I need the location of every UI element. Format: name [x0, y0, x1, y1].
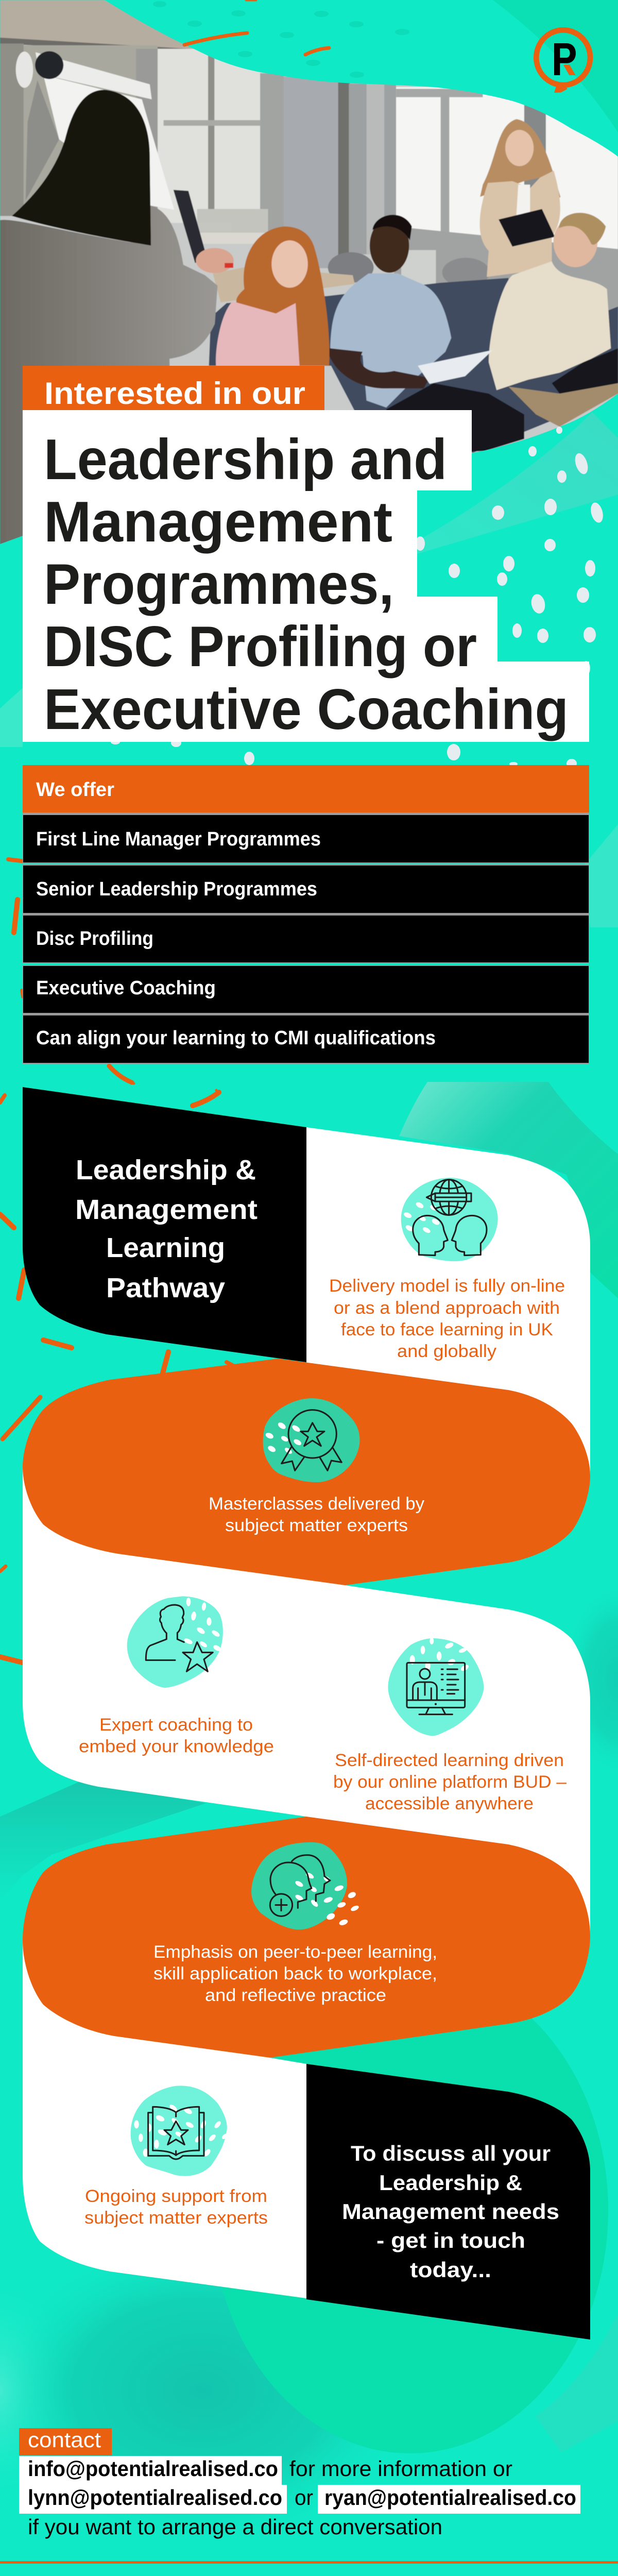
text: peer-to-peer learning: Emphasis on peer-to-peer learning, — [153, 1942, 437, 1962]
title block — [23, 366, 589, 742]
icon: two heads with plus — [251, 1842, 359, 1929]
text: peer-to-peer learning — [153, 1942, 437, 2005]
email line two: lynn@potentialrealised.co — [28, 2485, 282, 2510]
email line one: for more information or — [289, 2456, 512, 2481]
email line two: or — [295, 2485, 313, 2510]
text: masterclasses: Masterclasses delivered by — [209, 1494, 424, 1514]
text: self-directed learning: Self-directed learning driven — [335, 1751, 564, 1770]
email line two: ryan@potentialrealised.co — [324, 2485, 576, 2510]
contact block — [19, 2428, 580, 2539]
text: delivery model: Delivery model is fully on-line — [329, 1276, 565, 1296]
text: peer-to-peer learning: and reflective practice — [205, 1986, 386, 2005]
logo: P speech bubble — [536, 30, 590, 93]
icon: person with star — [127, 1596, 223, 1688]
pathway ribbon — [23, 1087, 590, 2340]
title kicker: Interested in our — [44, 376, 305, 411]
list item — [23, 914, 589, 963]
icon: award rosette — [263, 1398, 359, 1482]
contact label: contact — [28, 2428, 101, 2452]
black panel: call to action: today... — [410, 2258, 491, 2282]
seated red-haired woman in photo — [236, 226, 330, 366]
panel: delivery model — [329, 1178, 565, 1361]
ribbon white section two — [23, 1467, 590, 1935]
list item: Executive Coaching — [36, 977, 216, 999]
black panel: pathway heading: Management — [75, 1194, 258, 1225]
hero photo: trainer presenting to seated team — [0, 0, 618, 546]
panel: expert coaching — [79, 1596, 274, 1756]
standing woman in photo — [480, 119, 560, 197]
black panel: call to action — [306, 2064, 590, 2340]
list item — [23, 965, 589, 1014]
ribbon white section three — [23, 1940, 306, 2298]
text: delivery model: or as a blend approach with — [334, 1298, 560, 1318]
list heading — [23, 765, 589, 814]
panel: ongoing support — [84, 2086, 268, 2228]
ribbon white section one — [306, 1127, 590, 1476]
text: delivery model: and globally — [397, 1342, 496, 1361]
text: ongoing support: subject matter experts — [84, 2208, 268, 2228]
black panel: call to action: To discuss all your — [351, 2141, 551, 2165]
list item: Disc Profiling — [36, 928, 153, 950]
text: ongoing support — [84, 2187, 268, 2228]
panel: self-directed learning — [333, 1637, 566, 1814]
list item: Can align your learning to CMI qualifications — [36, 1027, 436, 1049]
email line two — [19, 2485, 580, 2514]
presenter in photo — [0, 206, 217, 546]
text: self-directed learning: by our online platform BUD – — [333, 1772, 566, 1792]
text: ongoing support: Ongoing support from — [85, 2187, 267, 2206]
text: expert coaching: Expert coaching to — [99, 1715, 253, 1735]
main title: Programmes, — [44, 552, 394, 616]
main title: DISC Profiling or — [44, 615, 477, 679]
text: masterclasses — [209, 1494, 424, 1535]
text: peer-to-peer learning: skill application back to workplace, — [153, 1964, 437, 1984]
seated blond man in photo — [508, 383, 618, 427]
icon: online tutor monitor — [388, 1637, 484, 1736]
email line one — [19, 2456, 512, 2485]
main title: Management — [44, 490, 392, 554]
list heading: We offer — [36, 779, 114, 801]
black panel: pathway heading: Learning — [106, 1232, 225, 1263]
main title: Leadership and — [44, 428, 447, 492]
contact closing line: if you want to arrange a direct conversation — [28, 2515, 442, 2539]
main title — [23, 410, 589, 742]
text: expert coaching — [79, 1715, 274, 1756]
seated man in blue shirt in photo — [386, 383, 524, 453]
panel: peer-to-peer learning — [23, 1817, 590, 2058]
list item — [23, 814, 589, 863]
flip chart in photo — [43, 75, 174, 210]
text: delivery model — [329, 1276, 565, 1361]
text: self-directed learning: accessible anywhere — [365, 1794, 534, 1814]
list item — [23, 865, 589, 914]
black panel: pathway heading: Pathway — [106, 1273, 225, 1303]
black panel: pathway heading — [23, 1087, 306, 1362]
black panel: call to action: Leadership & — [379, 2171, 522, 2195]
icon: open book with star — [131, 2086, 229, 2176]
white speckle dots — [111, 427, 614, 2576]
faint teal dashes on header shape — [153, 1, 409, 78]
offer list — [23, 765, 589, 1064]
panel: masterclasses — [23, 1359, 590, 1585]
text: delivery model: face to face learning in UK — [341, 1320, 553, 1340]
black panel: call to action: Management needs — [342, 2199, 559, 2224]
title kicker — [23, 366, 324, 415]
list item — [23, 1014, 589, 1064]
footer rule — [0, 2561, 618, 2564]
black panel: pathway heading: Leadership & — [76, 1155, 256, 1185]
black panel: call to action: - get in touch — [376, 2228, 525, 2252]
main title: Executive Coaching — [44, 677, 569, 741]
list item: First Line Manager Programmes — [36, 828, 321, 850]
icon: globe, pencil and two heads — [401, 1178, 498, 1261]
email line one: info@potentialrealised.co — [28, 2456, 278, 2481]
text: masterclasses: subject matter experts — [225, 1516, 408, 1535]
contact label — [19, 2428, 112, 2455]
text: expert coaching: embed your knowledge — [79, 1737, 274, 1756]
text: self-directed learning — [333, 1751, 566, 1814]
list item: Senior Leadership Programmes — [36, 878, 317, 900]
orange paint dashes — [0, 0, 329, 1663]
